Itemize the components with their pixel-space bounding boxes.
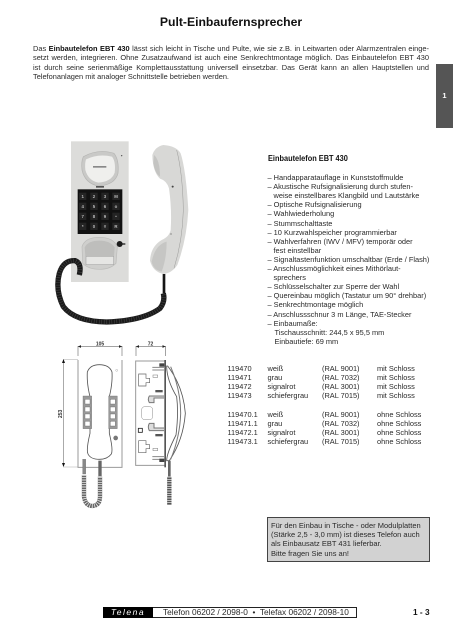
order table: (RAL 7032) (322, 419, 360, 428)
feature list: sprechers (274, 273, 306, 282)
order table: (RAL 9001) (322, 364, 360, 373)
order table: ohne Schloss (377, 428, 421, 437)
technical drawing: front view (78, 360, 122, 506)
feature list: weise einstellbares Klangbild und Lautstärke (274, 191, 419, 200)
feature list: – Handapparatauflage in Kunststoffmulde (268, 173, 403, 182)
order table: signalrot (268, 428, 295, 437)
feature list: – Anschlussschnur 3 m Länge, TAE-Stecker (268, 310, 411, 318)
keypad: 2 (93, 194, 96, 199)
order table: signalrot (268, 382, 295, 391)
keypad: 4 (81, 204, 84, 209)
order table: mit Schloss (377, 364, 415, 373)
intro text block (33, 44, 429, 81)
order table: (RAL 3001) (322, 428, 360, 437)
feature list: – Akustische Rufsignalisierung durch stufen- (268, 182, 413, 191)
order table: mit Schloss (377, 373, 415, 382)
keypad: 7 (81, 214, 84, 219)
feature list: Tischausschnitt: 244,5 x 95,5 mm (274, 328, 384, 337)
keypad (78, 189, 122, 234)
key switch (117, 241, 125, 247)
order table: (RAL 7015) (322, 437, 360, 446)
callout: Für den Einbau in Tische - oder Modulplatten (271, 521, 421, 530)
logo: Telena (103, 607, 153, 618)
order table: weiß (268, 410, 283, 418)
order table (228, 364, 422, 446)
order table: 119470 (228, 364, 252, 373)
intro text block: ist durch seine serienmäßige Komplettausstattung universell einsetzbar. Das Gerät kann an allen Hauptstellen und (33, 63, 429, 72)
order table: 119472 (228, 382, 252, 391)
intro text block: Das Einbautelefon EBT 430 lässt sich leicht in Tische und Pulte, wie sie z.B. in Leitwarten oder Alarmzentralen einge- (33, 44, 429, 53)
keypad: * (82, 224, 84, 229)
feature list (268, 173, 429, 346)
order table: ohne Schloss (377, 419, 421, 428)
feature list: – Signaltastenfunktion umschaltbar (Erde / Flash) (268, 255, 429, 264)
lower cradle (82, 237, 117, 269)
keypad: 8 (93, 214, 96, 219)
intro text block: setzt werden, integrieren. Ohne Zusatzaufwand ist auch eine Senkrechtmontage möglich. Das Einbautelefon EBT 430 (33, 53, 429, 62)
order table: 119471 (228, 373, 252, 382)
coiled cord (58, 261, 164, 322)
keypad: 6 (104, 204, 107, 209)
keypad: 3 (104, 194, 107, 199)
feature list: – Senkrechtmontage möglich (268, 300, 363, 309)
order table: schiefergrau (268, 437, 308, 446)
dimension drawing: width and depth: 72 (148, 342, 153, 348)
feature list: – Stummschalttaste (268, 218, 332, 228)
order table: mit Schloss (377, 391, 415, 400)
technical drawing: side view (136, 360, 185, 505)
title: Pult-Einbaufernsprecher (160, 15, 302, 29)
feature list: – Wahlwiederholung (268, 209, 334, 218)
dimension drawing: height (58, 359, 78, 467)
feature list: – Einbaumaße: (268, 319, 318, 328)
dimension drawing: width and depth (78, 342, 166, 356)
dimension drawing: height: 253 (58, 409, 64, 418)
callout: Bitte fragen Sie uns an! (271, 549, 349, 558)
keypad: 0 (93, 224, 96, 229)
order table: 119473.1 (228, 437, 258, 446)
order table: grau (268, 373, 282, 382)
feature list: – Wahlverfahren (IWV / MFV) temporär oder (268, 237, 413, 246)
feature list: – Quereinbau möglich (Tastatur um 90° drehbar) (268, 291, 426, 300)
callout: (Stärke 2,5 - 3,0 mm) ist dieses Telefon auch (271, 530, 420, 539)
order table: 119473 (228, 391, 252, 400)
intro text block: Telefonanlagen mit analoger Schnittstelle betrieben werden. (33, 72, 229, 81)
feature list: Einbautiefe: 69 mm (274, 337, 338, 346)
order table: schiefergrau (268, 391, 308, 400)
feature list: – Anschlussmöglichkeit eines Mithörlaut- (268, 264, 401, 273)
footer contact bar (103, 607, 357, 618)
handset (150, 145, 188, 274)
order table: grau (268, 419, 282, 428)
dimension drawing: width and depth: 105 (96, 342, 104, 348)
logo: Telena: Telena (111, 607, 145, 617)
keypad: • (115, 214, 117, 219)
order table: ohne Schloss (377, 410, 421, 418)
order table: weiß (268, 364, 283, 373)
feature list: fest einstellbar (274, 246, 321, 255)
order table: 119472.1 (228, 428, 258, 437)
feature list: – Schlüsselschalter zur Sperre der Wahl (268, 282, 399, 291)
callout (267, 517, 430, 562)
callout: als Einbausatz EBT 431 lieferbar. (271, 539, 382, 548)
keypad: 5 (93, 204, 96, 209)
page number: 1 - 3 (413, 607, 430, 617)
product heading: Einbautelefon EBT 430 (268, 153, 347, 163)
order table: (RAL 7032) (322, 373, 360, 382)
chapter tab (436, 64, 453, 128)
order table: (RAL 7015) (322, 391, 360, 400)
keypad: M (114, 194, 118, 199)
order table: 119471.1 (228, 419, 258, 428)
order table: (RAL 3001) (322, 382, 360, 391)
keypad: o (115, 204, 118, 209)
keypad: 9 (104, 214, 107, 219)
footer contact bar: Telefon 06202 / 2098-0 • Telefax 06202 / 2098-10 (163, 607, 349, 617)
feature list: – Optische Rufsignalisierung (268, 200, 362, 209)
handset cradle (82, 151, 122, 188)
order table: ohne Schloss (377, 437, 421, 446)
keypad: 1 (81, 194, 84, 199)
order table: (RAL 9001) (322, 410, 360, 418)
keypad: R (114, 224, 118, 229)
order table: 119470.1 (228, 410, 258, 418)
chapter tab: 1 (442, 91, 447, 100)
order table: mit Schloss (377, 382, 415, 391)
mounting panel (71, 141, 129, 282)
feature list: – 10 Kurzwahlspeicher programmierbar (268, 228, 397, 237)
keypad: # (104, 224, 107, 229)
